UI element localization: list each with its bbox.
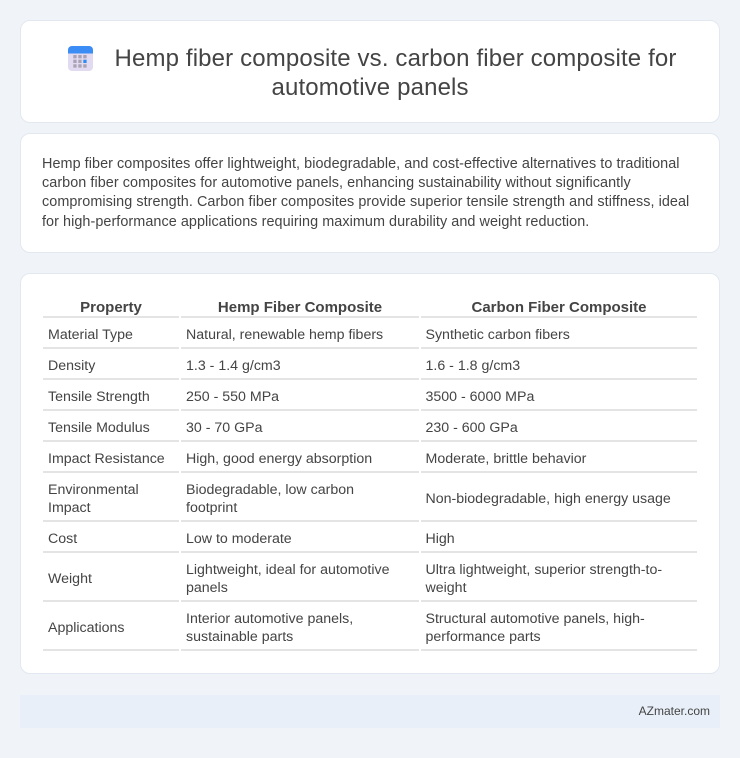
row: impact resistance: Moderate, brittle behavior: [426, 451, 586, 467]
row: applications: sustainable parts: [186, 629, 293, 645]
row: applications: Interior automotive panels,: [186, 611, 353, 627]
row: tensile modulus: 30 - 70 GPa: [186, 420, 263, 436]
row: tensile strength: [48, 389, 534, 405]
row: cost: [48, 531, 455, 547]
row: impact resistance: Impact Resistance: [48, 451, 165, 467]
intro text: [42, 156, 689, 230]
row: material type: Synthetic carbon fibers: [426, 327, 570, 343]
row: impact resistance: [48, 451, 586, 467]
row: cost: High: [426, 531, 455, 547]
footer bar: [20, 695, 720, 728]
row: density: [48, 358, 520, 374]
table header: Property: [80, 299, 142, 316]
row: material type: Natural, renewable hemp fibers: [186, 327, 383, 343]
row: environmental impact: Impact: [48, 500, 91, 516]
table: [43, 299, 697, 651]
row: environmental impact: Biodegradable, low carbon: [186, 482, 354, 498]
row: weight: Weight: [48, 571, 92, 587]
row: impact resistance: High, good energy absorption: [186, 451, 372, 467]
row: tensile strength: 3500 - 6000 MPa: [426, 389, 534, 405]
table header: [80, 299, 646, 316]
intro text: for high-performance applications requiring maximum durability and weight reduction.: [42, 214, 589, 230]
row: applications: Applications: [48, 620, 125, 636]
intro paragraph card: [20, 133, 720, 253]
row: weight: Lightweight, ideal for automotive: [186, 562, 389, 578]
row: tensile modulus: [48, 420, 518, 436]
title: Hemp fiber composite vs. carbon fiber composite for: [114, 45, 677, 72]
row: tensile modulus: Tensile Modulus: [48, 420, 150, 436]
footer credit: AZmater.com: [639, 704, 710, 718]
row: applications: Structural automotive panels, high-: [426, 611, 645, 627]
row: cost: Cost: [48, 531, 77, 547]
row: applications: performance parts: [426, 629, 541, 645]
row: density: Density: [48, 358, 95, 374]
row: weight: panels: [186, 580, 228, 596]
row: environmental impact: Non-biodegradable, high energy usage: [426, 491, 671, 507]
row: tensile strength: Tensile Strength: [48, 389, 150, 405]
row: environmental impact: Environmental: [48, 482, 139, 498]
row: material type: Material Type: [48, 327, 133, 343]
comparison table card: [20, 273, 720, 674]
row: environmental impact: footprint: [186, 500, 237, 516]
row: environmental impact: [48, 482, 671, 516]
title: automotive panels: [272, 74, 469, 101]
row: density: 1.3 - 1.4 g/cm3: [186, 358, 281, 374]
row: weight: [48, 562, 662, 596]
row: weight: weight: [426, 580, 467, 596]
row: cost: Low to moderate: [186, 531, 292, 547]
table header: Hemp Fiber Composite: [218, 299, 382, 316]
intro text: Hemp fiber composites offer lightweight, biodegradable, and cost-effective alternatives to traditional: [42, 156, 680, 172]
title card: [20, 20, 720, 123]
title: [114, 45, 677, 101]
row: weight: Ultra lightweight, superior strength-to-: [426, 562, 662, 578]
row: applications: [48, 611, 645, 645]
icon: calendar: [68, 46, 93, 71]
table header: Carbon Fiber Composite: [471, 299, 646, 316]
intro text: compromising strength. Carbon fiber composites provide superior tensile strength and stiffness, ideal: [42, 194, 689, 210]
row: tensile strength: 250 - 550 MPa: [186, 389, 279, 405]
row: density: 1.6 - 1.8 g/cm3: [426, 358, 520, 374]
row: material type: [48, 327, 570, 343]
row: tensile modulus: 230 - 600 GPa: [426, 420, 518, 436]
intro text: carbon fiber composites for automotive panels, enhancing sustainability without significantly: [42, 175, 631, 191]
